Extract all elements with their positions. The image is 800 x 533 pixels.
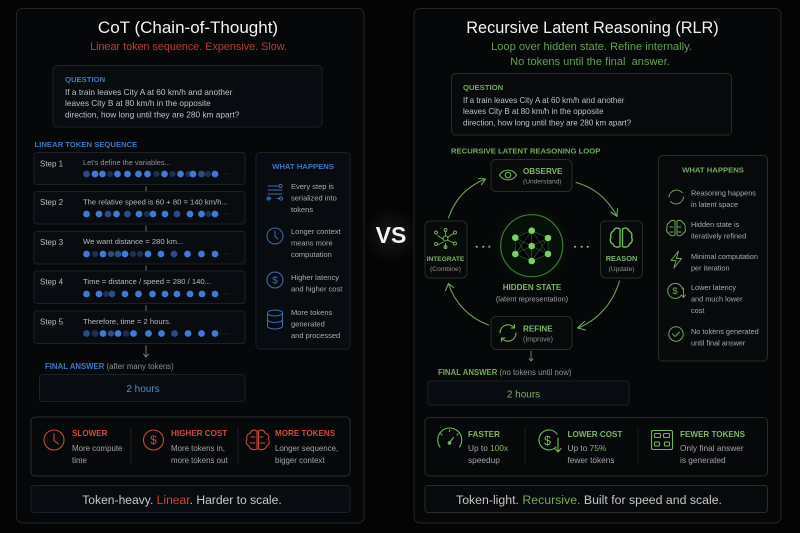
- title: RLR: Recursive Latent Reasoning (RLR): [466, 19, 719, 37]
- icon: check: [669, 327, 683, 341]
- question card: CoT: direction, how long until they are 280 km apart?: [65, 110, 240, 120]
- text: minimal computation: Minimal computation: [691, 252, 758, 261]
- question card: CoT: If a train leaves City A at 60 km/h and another: [65, 87, 233, 97]
- text: lower latency: Lower latency: [691, 283, 736, 292]
- node: reason: [600, 221, 642, 278]
- icon: lower cost: [668, 283, 686, 298]
- icon: red dollar: $: [150, 433, 157, 447]
- question card: CoT: QUESTION: [65, 75, 106, 84]
- panel: what happens (CoT): WHAT HAPPENS: [272, 162, 334, 171]
- question card: RLR: direction, how long until they are 280 km apart?: [463, 118, 632, 128]
- text: longer context: computation: [291, 250, 332, 259]
- text: longer context: Longer context: [291, 227, 342, 236]
- text: slower: SLOWER: [72, 429, 108, 438]
- summary strip: CoT: Token-heavy. Linear. Harder to scale.: [82, 493, 282, 507]
- text: fewer tokens: Only final answer: [680, 443, 744, 453]
- text: longer context: means more: [291, 238, 333, 248]
- icon: red brain: [246, 430, 269, 450]
- icon: lower cost: $: [672, 286, 678, 297]
- step 2: The relative speed is 60 + 80 = 140 km/h...: [83, 198, 228, 206]
- heading: reasoning loop: RECURSIVE LATENT REASONING LOOP: [451, 146, 600, 156]
- loop dots: left: [476, 246, 490, 248]
- text: no tokens: until final answer: [691, 338, 746, 348]
- step 5: Therefore, time = 2 hours.: [83, 317, 171, 326]
- panel: CoT (Chain-of-Thought): [16, 8, 364, 523]
- arrow: step 1 to 2: [144, 186, 148, 194]
- question card: RLR: [452, 74, 732, 135]
- step 2: [34, 192, 245, 224]
- text: slower: time: [72, 456, 88, 465]
- arrow: step 5 to final answer: [144, 346, 148, 357]
- text: lower cost: LOWER COST: [568, 430, 622, 439]
- text: faster: speedup: [468, 455, 500, 465]
- text: reasoning: Reasoning happens: [691, 188, 756, 198]
- step 4: [34, 271, 245, 304]
- icon: red clock: [44, 430, 64, 450]
- text: higher latency: Higher latency: [291, 273, 339, 282]
- step 4: ···: [223, 291, 230, 298]
- text: more tokens: [275, 429, 338, 465]
- arrow: refine to integrate: [446, 284, 488, 325]
- arrow: step 3 to 4: [144, 266, 148, 274]
- icon: red dollar: [144, 430, 164, 450]
- arrow: step 4 to 5: [144, 306, 148, 314]
- subtitle: CoT: Linear token sequence. Expensive. Slow.: [90, 41, 287, 53]
- node: observe: [491, 160, 572, 192]
- text: fewer tokens: is generated: [680, 455, 726, 465]
- text: faster: FASTER: [468, 430, 500, 439]
- icon: lower cost: [539, 430, 561, 452]
- icon: dollar: [267, 272, 283, 288]
- subtitle: RLR: No tokens until the final answer.: [510, 56, 670, 68]
- step 3: We want distance = 280 km...: [83, 237, 183, 246]
- heading: linear token sequence: LINEAR TOKEN SEQUENCE: [34, 140, 137, 149]
- node: observe: (Understand): [523, 178, 561, 186]
- icon: brain: [667, 220, 685, 236]
- step 4: Time = distance / speed = 280 / 140...: [83, 277, 211, 286]
- question card: CoT: [53, 66, 322, 127]
- final answer box: 2 hours: [507, 390, 540, 400]
- loop dots: right: [574, 246, 589, 248]
- text: slower: More compute: [72, 444, 123, 453]
- summary strip: CoT: [31, 486, 350, 512]
- text: slower: [72, 429, 123, 465]
- hidden state network: [492, 206, 572, 286]
- step 1: ···: [223, 171, 230, 178]
- panel: what happens (CoT): [256, 152, 350, 349]
- step 2: ···: [223, 211, 230, 218]
- arrow: step 2 to 3: [144, 226, 148, 234]
- panel: CoT drawbacks: [31, 417, 350, 476]
- text: more tokens: bigger context: [275, 456, 325, 465]
- text: faster: 100x: [490, 443, 509, 453]
- final answer label: FINAL ANSWER (no tokens until now): [438, 368, 572, 377]
- text: higher cost: more tokens out: [171, 456, 228, 465]
- icon: clock: [267, 228, 283, 244]
- hidden state label: [496, 283, 568, 304]
- question card: RLR: leaves City B at 80 km/h in the opposite: [463, 107, 604, 116]
- text: minimal computation: per iteration: [691, 264, 730, 272]
- node: reason: (Update): [609, 266, 634, 273]
- hidden state label: HIDDEN STATE: [503, 283, 562, 292]
- arrow: reason to refine: [578, 281, 620, 330]
- icon: token grid: [652, 430, 672, 450]
- final answer box: [428, 381, 629, 405]
- subtitle: RLR: Loop over hidden state. Refine internally.: [491, 41, 692, 53]
- icon: lightning: [671, 251, 682, 268]
- text: lower cost: Up to: [568, 443, 590, 453]
- text: higher cost: More tokens in,: [171, 444, 225, 453]
- arrow: refine to final answer: [529, 351, 533, 361]
- text: fewer tokens: FEWER TOKENS: [680, 430, 746, 439]
- text: no tokens: No tokens generated: [691, 327, 759, 336]
- node: refine: REFINE: [523, 324, 553, 334]
- panel: Recursive Latent Reasoning: [414, 8, 781, 523]
- text: more tokens: and processed: [291, 331, 340, 340]
- node: integrate: [425, 221, 467, 278]
- icon: database: [268, 310, 282, 329]
- step 5: Step 5: [40, 318, 64, 326]
- summary strip: RLR: [425, 486, 768, 512]
- step 3: ···: [223, 251, 230, 258]
- step 2: Step 2: [40, 198, 64, 207]
- icon: serialized steps: [267, 184, 283, 200]
- panel: RLR benefits: [425, 418, 768, 476]
- text: lower latency: cost: [691, 306, 704, 315]
- question card: RLR: QUESTION: [463, 83, 504, 92]
- step 1: Step 1: [40, 160, 64, 168]
- text: every step: serialized into: [291, 194, 337, 202]
- text: hidden state: iteratively refined: [691, 232, 746, 240]
- step 3: [34, 232, 245, 264]
- step 5: [34, 311, 245, 344]
- text: higher cost: [171, 429, 228, 465]
- question card: RLR: If a train leaves City A at 60 km/h and another: [463, 96, 625, 105]
- text: lower cost: [568, 430, 622, 465]
- node: integrate: INTEGRATE: [427, 256, 465, 263]
- step 1: Let's define the variables...: [83, 158, 171, 167]
- text: higher cost: HIGHER COST: [171, 429, 227, 438]
- hidden state label: (latent representation): [496, 294, 568, 304]
- text: faster: Up to: [468, 443, 490, 453]
- step 3: Step 3: [40, 238, 64, 247]
- text: more tokens: MORE TOKENS: [275, 429, 336, 438]
- text: faster: [468, 430, 509, 465]
- text: more tokens: Longer sequence,: [275, 444, 338, 453]
- panel: what happens (RLR): WHAT HAPPENS: [682, 166, 744, 174]
- icon: dollar: $: [272, 276, 278, 286]
- node: integrate: (Combine): [430, 266, 461, 273]
- summary strip: RLR: Token-light. Recursive. Built for speed and scale.: [456, 493, 722, 507]
- final answer label: FINAL ANSWER (after many tokens): [45, 362, 174, 371]
- node: refine: [491, 316, 572, 350]
- arrow: observe to reason: [576, 182, 618, 216]
- step 4: Step 4: [40, 278, 64, 286]
- final answer box: [40, 374, 245, 402]
- icon: gauge: [438, 428, 462, 447]
- node: observe: OBSERVE: [523, 167, 563, 176]
- text: more tokens: More tokens: [291, 308, 333, 317]
- panel: what happens (RLR): [658, 156, 768, 361]
- text: higher latency: and higher cost: [291, 284, 343, 294]
- final answer box: 2 hours: [126, 384, 160, 395]
- text: lower cost: 75%: [590, 443, 607, 453]
- step 5: ···: [223, 330, 230, 338]
- text: hidden state: Hidden state is: [691, 220, 740, 229]
- text: reasoning: in latent space: [691, 200, 738, 209]
- title: CoT: CoT (Chain-of-Thought): [98, 18, 278, 37]
- arrow: integrate to observe: [448, 178, 486, 218]
- icon: lower cost: $: [544, 434, 551, 448]
- text: lower latency: and much lower: [691, 294, 743, 304]
- text: fewer tokens: [680, 430, 746, 465]
- node: refine: (Improve): [523, 336, 553, 344]
- text: every step: Every step is: [291, 182, 334, 191]
- VS label: VS: [376, 222, 406, 248]
- VS label: [363, 207, 419, 263]
- text: lower cost: fewer tokens: [568, 455, 615, 465]
- icon: loop: [669, 190, 684, 204]
- text: every step: tokens: [291, 205, 313, 214]
- node: reason: REASON: [606, 254, 637, 263]
- text: more tokens: generated: [291, 320, 325, 328]
- question card: CoT: leaves City B at 80 km/h in the opposite: [65, 98, 211, 108]
- step 1: [34, 152, 245, 184]
